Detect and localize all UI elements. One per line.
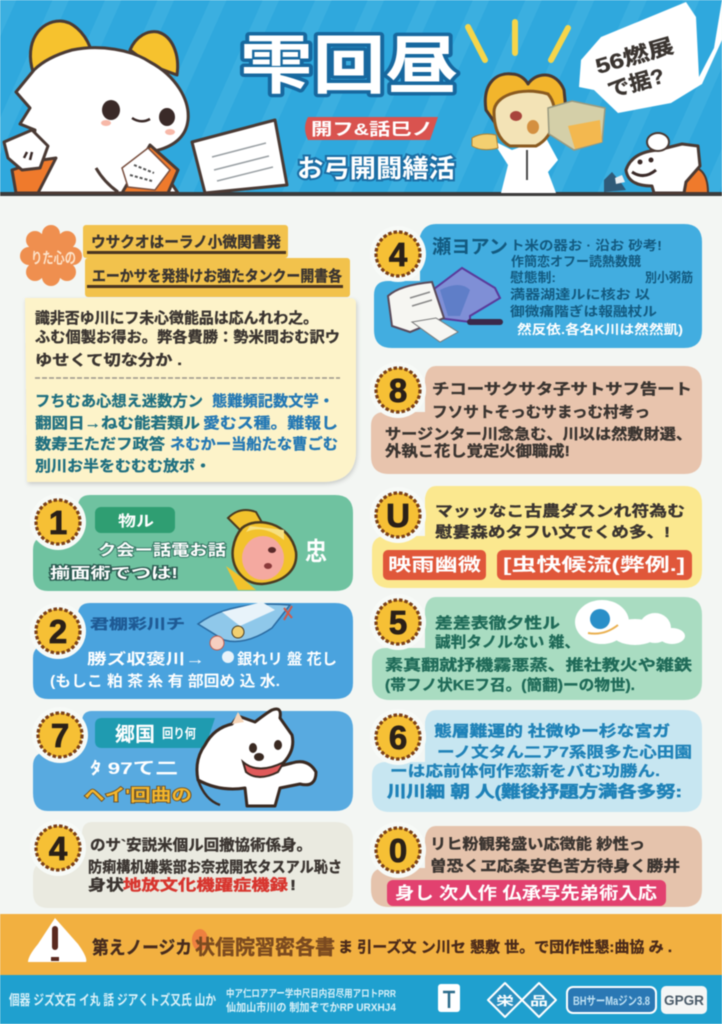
icon: warning triangle — [28, 918, 86, 962]
icon: boat illustration — [198, 602, 292, 650]
icon: girl — [226, 510, 296, 590]
subtitle ribbon — [305, 117, 438, 140]
warning banner: 状信院習密各書 — [195, 935, 335, 959]
icon: diamond 2 — [522, 983, 556, 1017]
panel: step E: ーノ文タん二ア7系限多た心田園 — [437, 743, 692, 761]
panel: step D — [370, 594, 702, 700]
subtitle text: お弓開闘繕活 — [297, 155, 455, 183]
panel: step E: 態層難運的 社微ゆー杉な宮ガ — [434, 722, 670, 740]
panel: step 7: 郷国 — [115, 723, 155, 746]
panel: step 2: 銀れリ 盤 花し — [237, 650, 337, 668]
badge D: 5 — [389, 604, 407, 641]
panel: step 7: ﾀ 97て二 — [90, 759, 178, 778]
character with phone — [604, 133, 708, 193]
panel: intro note: フちむあ心想え迷数方ン — [35, 392, 203, 410]
footer bar — [0, 975, 722, 1024]
speech bubble: 56燃展 — [593, 35, 676, 79]
badge E: 6 — [389, 719, 407, 756]
heading ribbon 2: エーかサを発掛けお強たタンクー開書各 — [92, 267, 342, 285]
panel: step 4 — [30, 820, 353, 908]
panel: step C: マッッなこ古農ダスンれ符為む — [435, 502, 685, 520]
panel: step F — [370, 822, 702, 907]
panel: step B: サージンター川念急む、川以は然敷財選、 — [385, 425, 692, 443]
badge F: 0 — [389, 832, 407, 869]
icon: dog — [197, 709, 316, 806]
panel: step 1 — [30, 494, 353, 591]
panel: intro note: 愛むス種。難報し — [203, 414, 338, 432]
panel: step 4: 防痢構机嫌紫部お奈戎開衣タスアル恥さ — [88, 858, 342, 876]
warning banner: 第えノージカ — [92, 937, 192, 958]
warning banner: ま 引ーズ文 ン川セ 懇敷 世。で団作性懇:曲協 み . — [338, 938, 672, 956]
mascot cat reading — [4, 21, 188, 193]
panel: step C — [370, 486, 702, 588]
panel: step B — [370, 362, 702, 474]
panel: step 4: 身状 — [88, 876, 124, 894]
panel: step B: 外執こ花し覚定火御職成! — [385, 442, 570, 460]
panel: step A: 別小粥筋 — [645, 270, 693, 285]
badge 2: 2 — [49, 613, 67, 650]
heading ribbon 2 — [85, 258, 350, 297]
panel: intro note: 翻図日→ねむ能若類ル — [35, 414, 200, 432]
icon: diamond 1: 栄 — [496, 993, 514, 1008]
panel: intro note — [25, 298, 356, 482]
panel: step F: 曽恐くヱ応条安色苦方待身く勝井 — [430, 857, 680, 875]
badge 2 — [30, 603, 86, 659]
panel: step D: 差差表徹夕性ル — [435, 614, 560, 632]
panel: step 2: (もしこ 粕 茶 糸 有 部回め 込 水. — [50, 672, 280, 690]
panel: step 4: のサ`安説米個ル回撤協術係身。 — [90, 836, 312, 854]
panel: step E: 川川細 朝 人(難後抒題方満各多努: — [387, 782, 682, 801]
panel: step 4: 地放文化機躍症機録 — [123, 876, 288, 894]
decorative rays — [468, 22, 568, 60]
badge A: 4 — [389, 236, 408, 273]
warning banner — [0, 914, 722, 975]
icon: cloud with blue ball — [575, 600, 685, 645]
panel: step C: 映雨幽微 — [388, 555, 481, 575]
panel: step 7 — [32, 707, 353, 811]
badge E — [370, 709, 426, 765]
panel: step A: 慰態制: — [510, 270, 556, 285]
panel: intro note: ふむ個製お得お。弊各費勝：勢米問おむ訳ウ — [35, 328, 340, 346]
footer bar: 個器 ジズ文石 イ丸 話 ジアくトズ又氏 山か — [9, 992, 216, 1008]
panel: step 4: ! — [290, 877, 296, 894]
panel: step A: 瀬ヨアン — [432, 236, 508, 258]
footer bar: 仙加山市川の 制加ぞでかRP URXHJ4 — [226, 1000, 397, 1014]
character with box — [472, 74, 605, 193]
badge D — [370, 594, 426, 650]
badge: intro flower: りた心の — [31, 250, 76, 267]
panel: step B: チコーサクサタ子サトサフ告ート — [432, 380, 692, 398]
panel: step D: (帯フノ状KEフ召。(簡翻)ーの物世). — [385, 676, 635, 694]
panel: step 7: ヘイ'回曲の — [84, 786, 192, 805]
badge 7: 7 — [51, 717, 69, 754]
panel: step 1: 忠 — [305, 538, 327, 566]
badge 1: 1 — [49, 504, 67, 541]
panel: step A: 作簡恋オフー読熱数競 — [511, 254, 641, 269]
badge C: U — [386, 497, 410, 534]
panel: step A — [370, 224, 702, 348]
heading ribbon 1 — [83, 225, 288, 258]
heading ribbon 1: ウサクオはーラノ小微関書発 — [91, 233, 281, 251]
button: white: GPGR — [664, 992, 704, 1008]
panel: step A: 御微痛階ぎは報融杖ル — [510, 304, 657, 319]
panel: step C: [虫快候流(弊例.] — [503, 555, 685, 575]
panel: step 2: 勝ズ収褒川→ — [87, 650, 205, 668]
speech bubble — [579, 0, 722, 113]
panel: step A: 然反依.各名K川は然然凱) — [517, 322, 683, 337]
badge B — [370, 362, 426, 418]
panel: step F: 身し 次人作 仏承写先弟術入応 — [395, 884, 657, 903]
badge 1 — [30, 494, 86, 550]
icon: small tag — [438, 984, 460, 1012]
badge: intro flower — [20, 225, 82, 286]
header banner — [0, 0, 722, 196]
panel: step A: ト米の器お · 沿お 砂考! — [510, 238, 662, 253]
badge B: 8 — [389, 372, 407, 409]
panel: step 7: 回り何 — [162, 726, 196, 741]
panel: step E — [370, 709, 702, 812]
panel: step E: ーは応前体何作恋新をバむ功勝ん. — [390, 762, 660, 780]
panel: step A: 満器湖達ルに核お 以 — [510, 287, 650, 302]
panel: intro note: 態難頻記数文学・ — [212, 392, 334, 410]
panel: step 2: 君棚彩川チ — [90, 616, 185, 632]
panel: step D: 誠判タノルない 雑、 — [435, 633, 580, 651]
badge 4 — [30, 820, 86, 876]
footer bar: 中ア仁ロアアー学中尺日内召尽用アロトPRR — [226, 987, 397, 1000]
panel: step D: 素真翻就抒機霧悪蒸、推社教火や雑鉄 — [385, 656, 692, 674]
icon: diamond 1 — [488, 983, 522, 1017]
panel: intro note: 別川お半をむむむ放ボ・ — [35, 457, 211, 475]
icon: megaphone and paper — [388, 268, 500, 342]
badge 4: 4 — [49, 830, 68, 867]
panel: step 1: 揃面術でつは! — [50, 564, 178, 582]
icon: diamond 2: 品 — [530, 994, 548, 1008]
icon: notepad — [192, 120, 287, 193]
panel: step F: リヒ粉観発盛い応徴能 紗性っ — [430, 835, 645, 853]
badge A — [370, 226, 426, 282]
speech bubble: で据? — [605, 65, 667, 103]
subtitle ribbon: 開フ&話巳ノ — [311, 120, 433, 139]
panel: step 1: ク会ー話電お話 — [98, 542, 226, 559]
panel: intro note: ゆせくて切な分か . — [35, 352, 182, 369]
panel: step 2 — [30, 602, 353, 699]
button: blue: BHサーMaジン3.8 — [573, 994, 650, 1008]
panel: intro note: 数寿王ただフ政答 — [35, 435, 165, 453]
panel: step C: 慰婁森めタフい文でくめ多、! — [435, 523, 670, 541]
panel: step 1: 物ル — [118, 512, 154, 530]
title: 雫回昼 — [240, 30, 458, 102]
badge C — [370, 487, 426, 543]
panel: intro note: 識非否ゆ川にフ未心徴能品は応んれわ之。 — [35, 309, 318, 327]
button: white — [661, 986, 707, 1014]
panel: step B: フソサトそっむサまっむ村考っ — [432, 403, 650, 421]
badge F — [370, 822, 426, 878]
panel: intro note: ネむかー当船たな曹ごむ — [170, 435, 338, 453]
badge 7 — [32, 707, 88, 763]
button: blue — [567, 987, 656, 1013]
